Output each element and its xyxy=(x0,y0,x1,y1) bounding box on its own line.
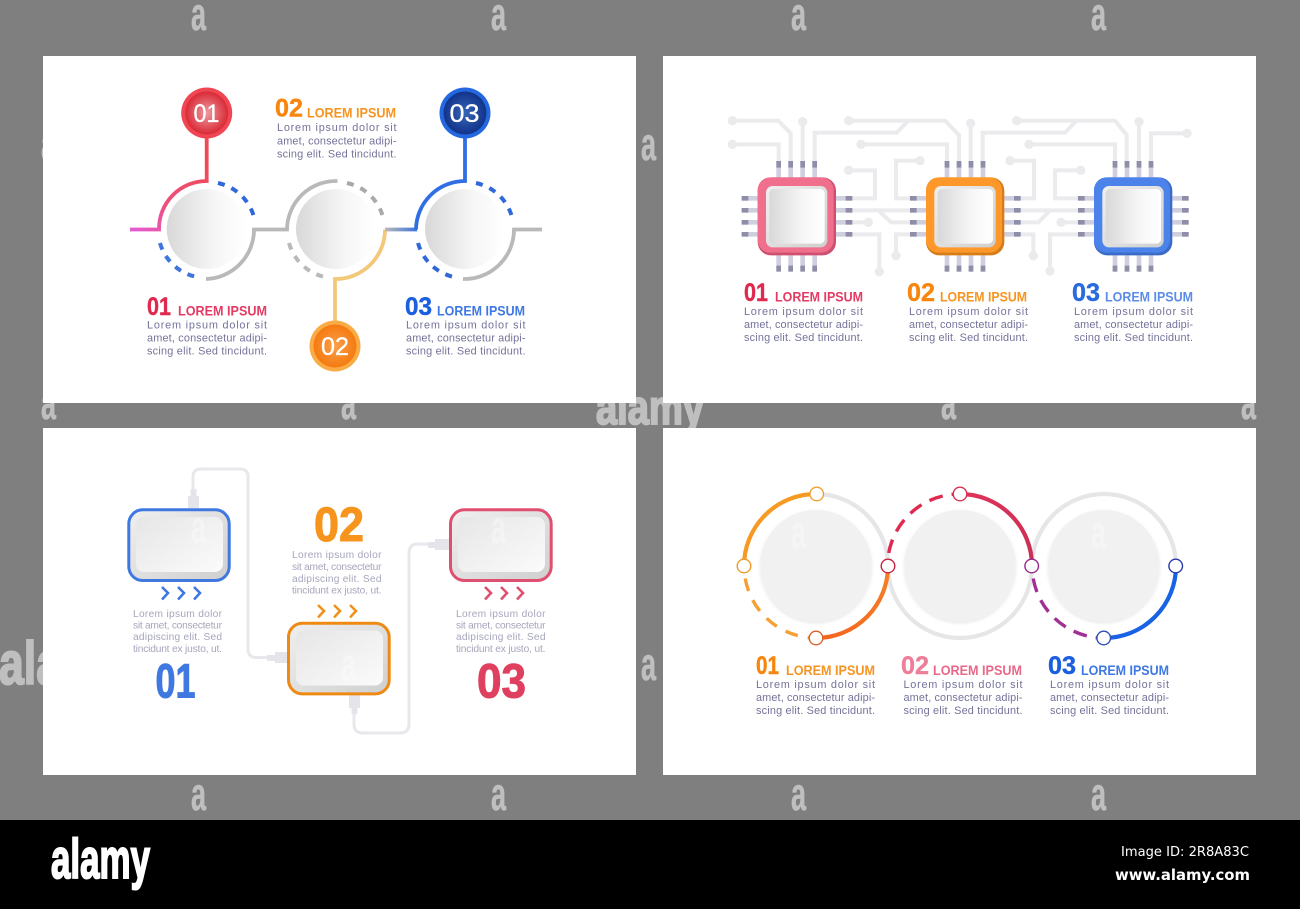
watermarks: a xyxy=(791,768,806,820)
connectors xyxy=(188,489,449,714)
text block 02: scing elit. Sed tincidunt. xyxy=(277,148,396,160)
text block 03: 03 xyxy=(1048,652,1076,680)
text block 01 xyxy=(147,293,267,358)
badge 02 xyxy=(310,320,360,372)
watermark overlay: a xyxy=(341,638,356,690)
text block 01: 01 xyxy=(147,293,171,321)
watermarks: a xyxy=(191,768,206,820)
text block 01: sit amet, consectetur xyxy=(133,620,223,632)
text block 01 xyxy=(744,279,863,344)
inner discs xyxy=(760,510,1159,622)
text block 03: Lorem ipsum dolor sit xyxy=(1074,306,1193,318)
badge 03: 03 xyxy=(450,100,480,128)
chip 01 xyxy=(742,161,852,272)
number 01: 01 xyxy=(156,656,196,708)
text block 02: amet, consectetur adipi- xyxy=(909,319,1028,331)
text block 02: amet, consectetur adipi- xyxy=(904,692,1023,704)
text block 02: 02 xyxy=(901,652,929,680)
badge 01: 01 xyxy=(194,100,220,128)
text block 02: Lorem ipsum dolor sit xyxy=(277,122,396,134)
text block 03 xyxy=(405,293,526,358)
device 01 xyxy=(129,510,229,580)
footer bar xyxy=(0,820,1300,909)
image id: Image ID: 2R8A83C xyxy=(1121,845,1249,860)
watermarks: a xyxy=(941,377,956,429)
text block 01: LOREM IPSUM xyxy=(178,302,267,318)
watermarks: a xyxy=(641,118,656,170)
text block 03: adipiscing elit. Sed xyxy=(456,632,546,643)
text block 01: amet, consectetur adipi- xyxy=(756,692,875,704)
text block 02 xyxy=(275,94,397,160)
watermarks: a xyxy=(1091,768,1106,820)
text block 01 xyxy=(756,652,875,717)
ring nodes xyxy=(737,487,1182,645)
text block 02: LOREM IPSUM xyxy=(307,104,396,120)
text block 03: Lorem ipsum dolor xyxy=(456,609,546,620)
text block 02: Lorem ipsum dolor sit xyxy=(904,679,1022,691)
text block 01: Lorem ipsum dolor sit xyxy=(756,679,875,691)
badge 03 xyxy=(440,88,490,138)
text block 01: adipiscing elit. Sed xyxy=(133,632,222,643)
badge 01 xyxy=(181,88,232,138)
chevrons 03 xyxy=(485,587,523,600)
text block 02: amet, consectetur adipi- xyxy=(277,136,397,148)
text block 03: scing elit. Sed tincidunt. xyxy=(1050,705,1169,717)
text block 03: amet, consectetur adipi- xyxy=(1050,692,1169,704)
text block 01: 01 xyxy=(744,279,768,307)
watermarks: a xyxy=(341,377,356,429)
text block 01: amet, consectetur adipi- xyxy=(147,332,267,344)
text block 02: adipiscing elit. Sed xyxy=(292,574,382,585)
inner discs xyxy=(167,189,505,269)
number 03: 03 xyxy=(477,656,526,708)
watermark overlay: a xyxy=(791,506,806,558)
panel: circles timeline xyxy=(43,56,636,403)
watermark overlay: a xyxy=(1091,506,1106,558)
text block 02 xyxy=(901,652,1023,717)
text block 03: sit amet, consectetur xyxy=(456,620,546,632)
text block 03: 03 xyxy=(1072,279,1100,307)
text block 03: LOREM IPSUM xyxy=(1105,288,1193,304)
watermarks: a xyxy=(1241,377,1256,429)
number 02: 02 xyxy=(314,499,364,552)
watermarks: alamy xyxy=(596,382,704,435)
text block 02: Lorem ipsum dolor sit xyxy=(909,306,1028,318)
text block 01: 01 xyxy=(756,652,779,680)
device 03 xyxy=(450,510,551,580)
text block 03: tincidunt ex justo, ut. xyxy=(456,644,546,655)
text block 02 xyxy=(292,550,382,596)
chip 02 xyxy=(910,161,1021,272)
watermarks: a xyxy=(641,638,656,690)
panel: linked rings xyxy=(663,428,1256,775)
text block 02: 02 xyxy=(275,94,303,122)
text block 01: LOREM IPSUM xyxy=(786,662,875,678)
panel: power banks xyxy=(43,428,636,775)
text block 01: Lorem ipsum dolor sit xyxy=(147,320,267,332)
device 02 xyxy=(288,623,389,694)
text block 03: scing elit. Sed tincidunt. xyxy=(1074,332,1193,344)
chip 03 xyxy=(1078,161,1189,272)
text block 03: LOREM IPSUM xyxy=(437,302,525,318)
text block 01 xyxy=(133,609,223,655)
text block 02 xyxy=(907,279,1028,344)
watermark overlay: a xyxy=(491,501,506,553)
text block 02: Lorem ipsum dolor xyxy=(292,550,382,561)
text block 03: Lorem ipsum dolor sit xyxy=(1050,679,1169,691)
watermark overlay xyxy=(191,501,1106,690)
text block 01: scing elit. Sed tincidunt. xyxy=(756,705,875,717)
ring arcs xyxy=(744,494,1176,638)
text block 02: scing elit. Sed tincidunt. xyxy=(904,705,1022,717)
text block 02: LOREM IPSUM xyxy=(940,288,1027,304)
watermarks: a xyxy=(41,118,56,170)
text block 02: scing elit. Sed tincidunt. xyxy=(909,332,1028,344)
watermarks: ala xyxy=(0,630,61,697)
text block 03 xyxy=(456,609,546,655)
watermarks: a xyxy=(41,377,56,429)
text block 01: LOREM IPSUM xyxy=(775,288,863,304)
connector lines xyxy=(130,138,542,322)
text block 03: Lorem ipsum dolor sit xyxy=(406,320,526,332)
text block 02: tincidunt ex justo, ut. xyxy=(292,586,382,596)
text block 03: 03 xyxy=(405,293,432,321)
watermarks: a xyxy=(491,768,506,820)
text block 02: 02 xyxy=(907,279,935,307)
chevrons 02 xyxy=(318,605,356,618)
text block 01: tincidunt ex justo, ut. xyxy=(133,644,222,655)
circuit traces xyxy=(728,116,1192,276)
watermark overlay: a xyxy=(191,501,206,553)
text block 03: LOREM IPSUM xyxy=(1081,662,1169,678)
text block 01: scing elit. Sed tincidunt. xyxy=(744,332,863,344)
text block 02: sit amet, consectetur xyxy=(292,562,382,573)
text block 01: Lorem ipsum dolor xyxy=(133,609,223,620)
badge 02: 02 xyxy=(321,333,349,361)
text block 03: amet, consectetur adipi- xyxy=(406,332,526,344)
text block 01: amet, consectetur adipi- xyxy=(744,319,863,331)
chevrons 01 xyxy=(162,587,200,600)
text block 02: LOREM IPSUM xyxy=(933,662,1022,678)
logo: alamy xyxy=(51,827,150,890)
text block 03 xyxy=(1072,279,1193,344)
text block 03: scing elit. Sed tincidunt. xyxy=(406,346,526,358)
text block 03: amet, consectetur adipi- xyxy=(1074,319,1193,331)
cables xyxy=(193,469,430,733)
panel: microchips xyxy=(663,56,1256,403)
text block 01: scing elit. Sed tincidunt. xyxy=(147,346,267,358)
website: www.alamy.com xyxy=(1115,866,1250,884)
text block 01: Lorem ipsum dolor sit xyxy=(744,306,863,318)
text block 03 xyxy=(1048,652,1169,717)
